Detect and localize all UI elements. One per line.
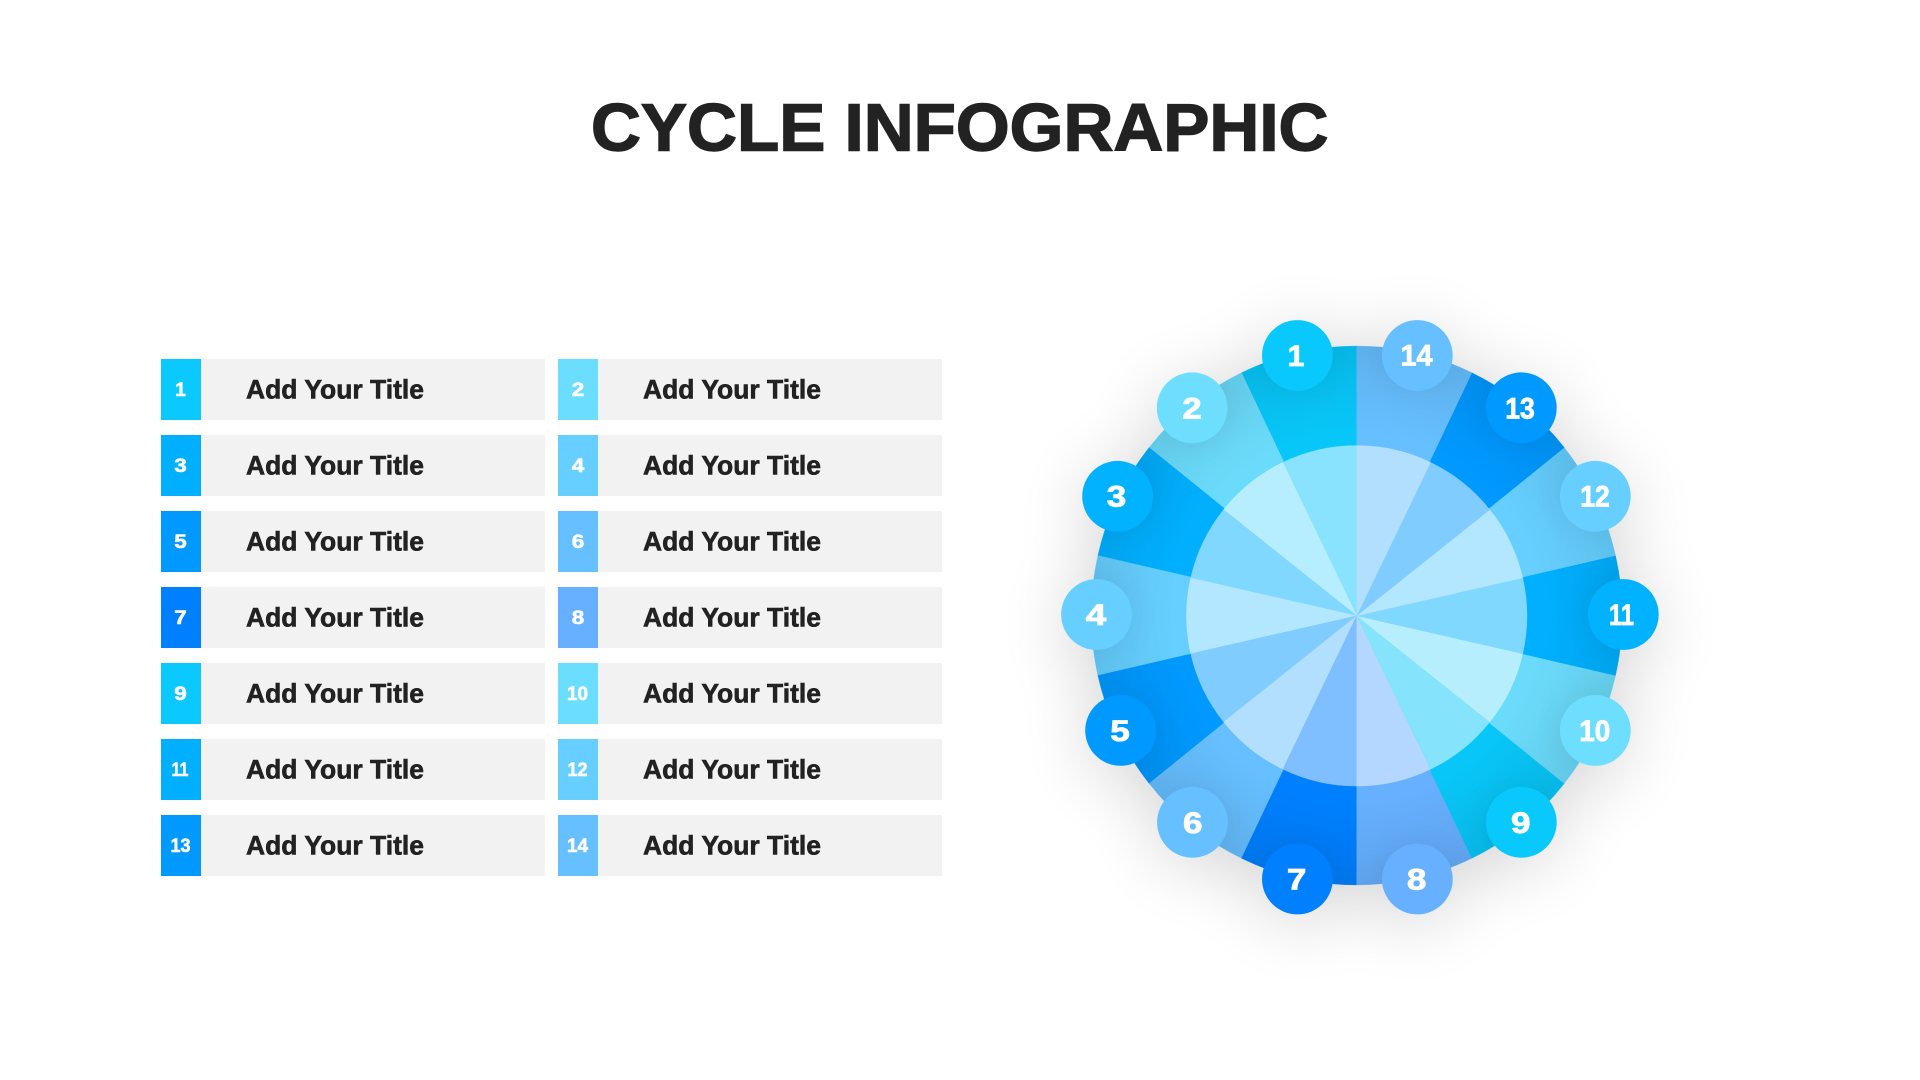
badge 5 (1085, 695, 1156, 766)
list item 13 (161, 815, 545, 876)
badge 14: 14 (1400, 340, 1433, 373)
list panel (161, 359, 942, 876)
list item 11: Add Your Title (246, 754, 424, 784)
list item 12: Add Your Title (643, 754, 821, 784)
badge 14 (1382, 320, 1453, 391)
list item 11 (161, 739, 545, 800)
list item 2: Add Your Title (643, 374, 821, 404)
badge 10: 10 (1579, 715, 1610, 748)
list item 8: 8 (572, 608, 584, 629)
list item 1: 1 (175, 380, 186, 401)
list item 14: Add Your Title (643, 830, 821, 860)
badge 6: 6 (1183, 807, 1203, 840)
list item 4: Add Your Title (643, 450, 821, 480)
list item 9 (161, 663, 545, 724)
list item 12 (558, 739, 942, 800)
list item 10 (558, 663, 942, 724)
badge 1: 1 (1288, 340, 1304, 373)
list item 5: Add Your Title (246, 526, 424, 556)
list item 3 (161, 435, 545, 496)
list item 4 (558, 435, 942, 496)
title: CYCLE INFOGRAPHIC (591, 90, 1328, 166)
badge 7: 7 (1287, 864, 1306, 896)
list item 8: Add Your Title (643, 602, 821, 632)
list item 4: 4 (572, 456, 585, 477)
badge 2: 2 (1182, 392, 1202, 425)
list item 6 (558, 511, 942, 572)
inner pie wedges (1174, 430, 1539, 801)
list item 3: 3 (174, 456, 187, 477)
cycle wheel (1060, 316, 1659, 924)
badge 1 (1262, 320, 1333, 391)
badge 12: 12 (1580, 480, 1610, 513)
list item 9: Add Your Title (246, 678, 424, 708)
badge 10 (1560, 695, 1631, 766)
badge 3 (1082, 461, 1153, 532)
list item 2: 2 (572, 380, 584, 401)
list item 1 (161, 359, 545, 420)
list item 1: Add Your Title (246, 374, 424, 404)
badge 6 (1157, 787, 1228, 858)
list item 2 (558, 359, 942, 420)
badge 9: 9 (1511, 807, 1531, 840)
badge 13: 13 (1505, 392, 1535, 425)
list item 13: 13 (170, 836, 190, 857)
list item 9: 9 (174, 684, 187, 705)
list item 6: Add Your Title (643, 526, 821, 556)
badge 11 (1588, 579, 1659, 650)
list item 5 (161, 511, 545, 572)
badge 3: 3 (1107, 480, 1126, 514)
list item 7 (161, 587, 545, 648)
badge 4 (1061, 579, 1132, 650)
outer ring wedges (1072, 322, 1641, 909)
list item 11: 11 (172, 760, 189, 781)
list item 14 (558, 815, 942, 876)
badge 9 (1486, 787, 1557, 858)
badge 4: 4 (1086, 599, 1107, 632)
list item 13: Add Your Title (246, 830, 424, 860)
list item 3: Add Your Title (246, 450, 424, 480)
badge 2 (1157, 372, 1228, 443)
list item 7: 7 (174, 608, 187, 629)
list item 7: Add Your Title (246, 602, 424, 632)
list item 10: Add Your Title (643, 678, 821, 708)
list item 10: 10 (567, 684, 588, 705)
list item 12: 12 (568, 760, 588, 781)
badge 5: 5 (1110, 715, 1130, 748)
badge 7 (1262, 844, 1333, 914)
list item 6: 6 (572, 532, 584, 553)
badge 12 (1560, 461, 1631, 532)
badge 11: 11 (1609, 599, 1634, 632)
badge 13 (1486, 372, 1557, 443)
list item 8 (558, 587, 942, 648)
badge 8 (1382, 844, 1453, 914)
list item 14: 14 (567, 836, 588, 857)
list item 5: 5 (174, 532, 187, 553)
badge 8: 8 (1407, 864, 1426, 896)
